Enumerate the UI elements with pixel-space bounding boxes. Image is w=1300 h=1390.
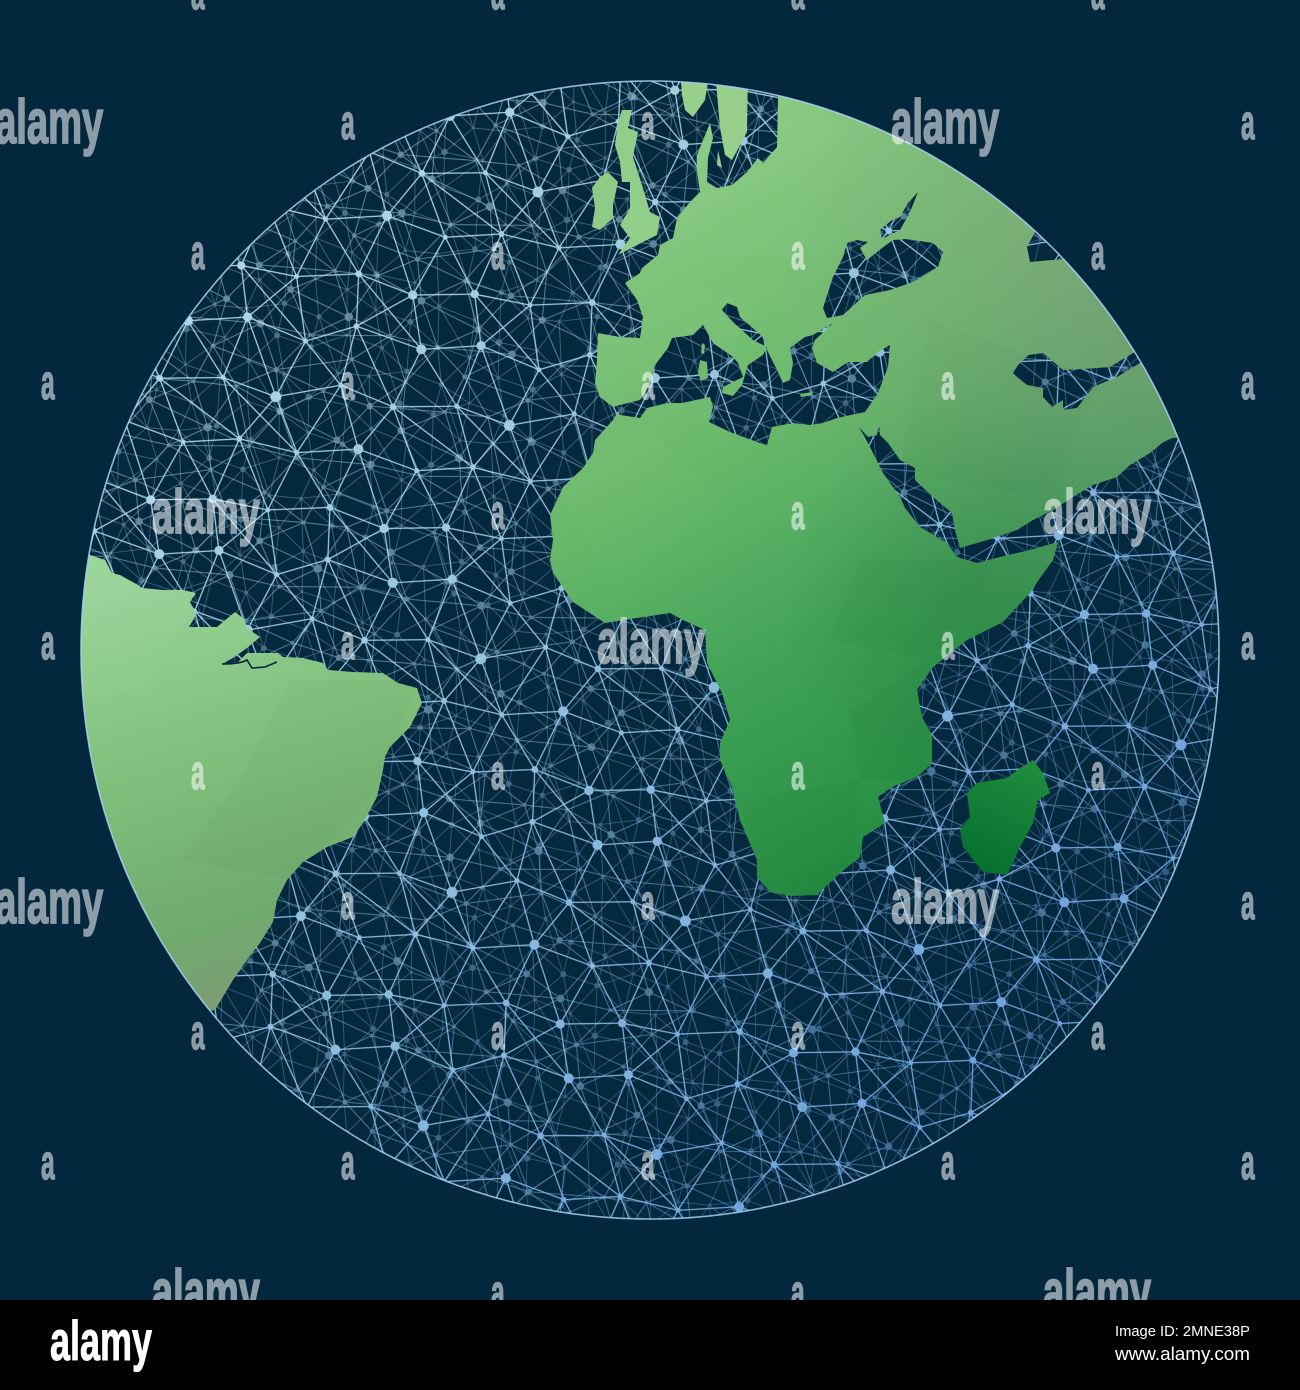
land: Great Britain [615,110,660,255]
website: www.alamy.com [1114,1344,1250,1364]
watermark words: alamy [152,476,260,546]
land: Madagascar [960,760,1050,875]
watermark letters: aaaa [191,746,1105,800]
land: Scandinavia [681,82,748,168]
watermark words: alamy [1043,476,1151,546]
bottom bar [0,1300,1300,1390]
landmasses [81,82,1178,1011]
watermark words [0,86,1151,1326]
watermark letters: aaaa [191,1006,1105,1060]
watermark words: alamy [891,86,1000,156]
watermark letters: aaaa [41,616,1255,670]
land: South America [81,554,422,1011]
land: Mediterranean islands [698,343,813,397]
land: Europe, Africa and Asia [550,96,1178,896]
watermark words: alamy [891,866,1000,936]
watermark letters: aaaaa [41,1136,1255,1190]
land: Ireland [592,172,618,230]
watermark letters: aaa [341,96,1255,150]
watermark letters: aa [491,1266,805,1320]
watermark letters: aaa [341,876,1255,930]
watermark letters: aaaa [191,226,1105,280]
globe outline [81,81,1219,1219]
watermark words: alamy [1043,1256,1151,1326]
bar logo: alamy [50,1309,152,1372]
image id: Image ID: 2MNE38P [1115,1323,1250,1340]
watermark words: alamy [152,1256,260,1326]
globe ocean with network mesh [81,81,1219,1219]
watermark words: alamy [597,606,706,676]
watermark letters: aa [491,486,805,540]
watermark letters: aaaaa [41,356,1255,410]
